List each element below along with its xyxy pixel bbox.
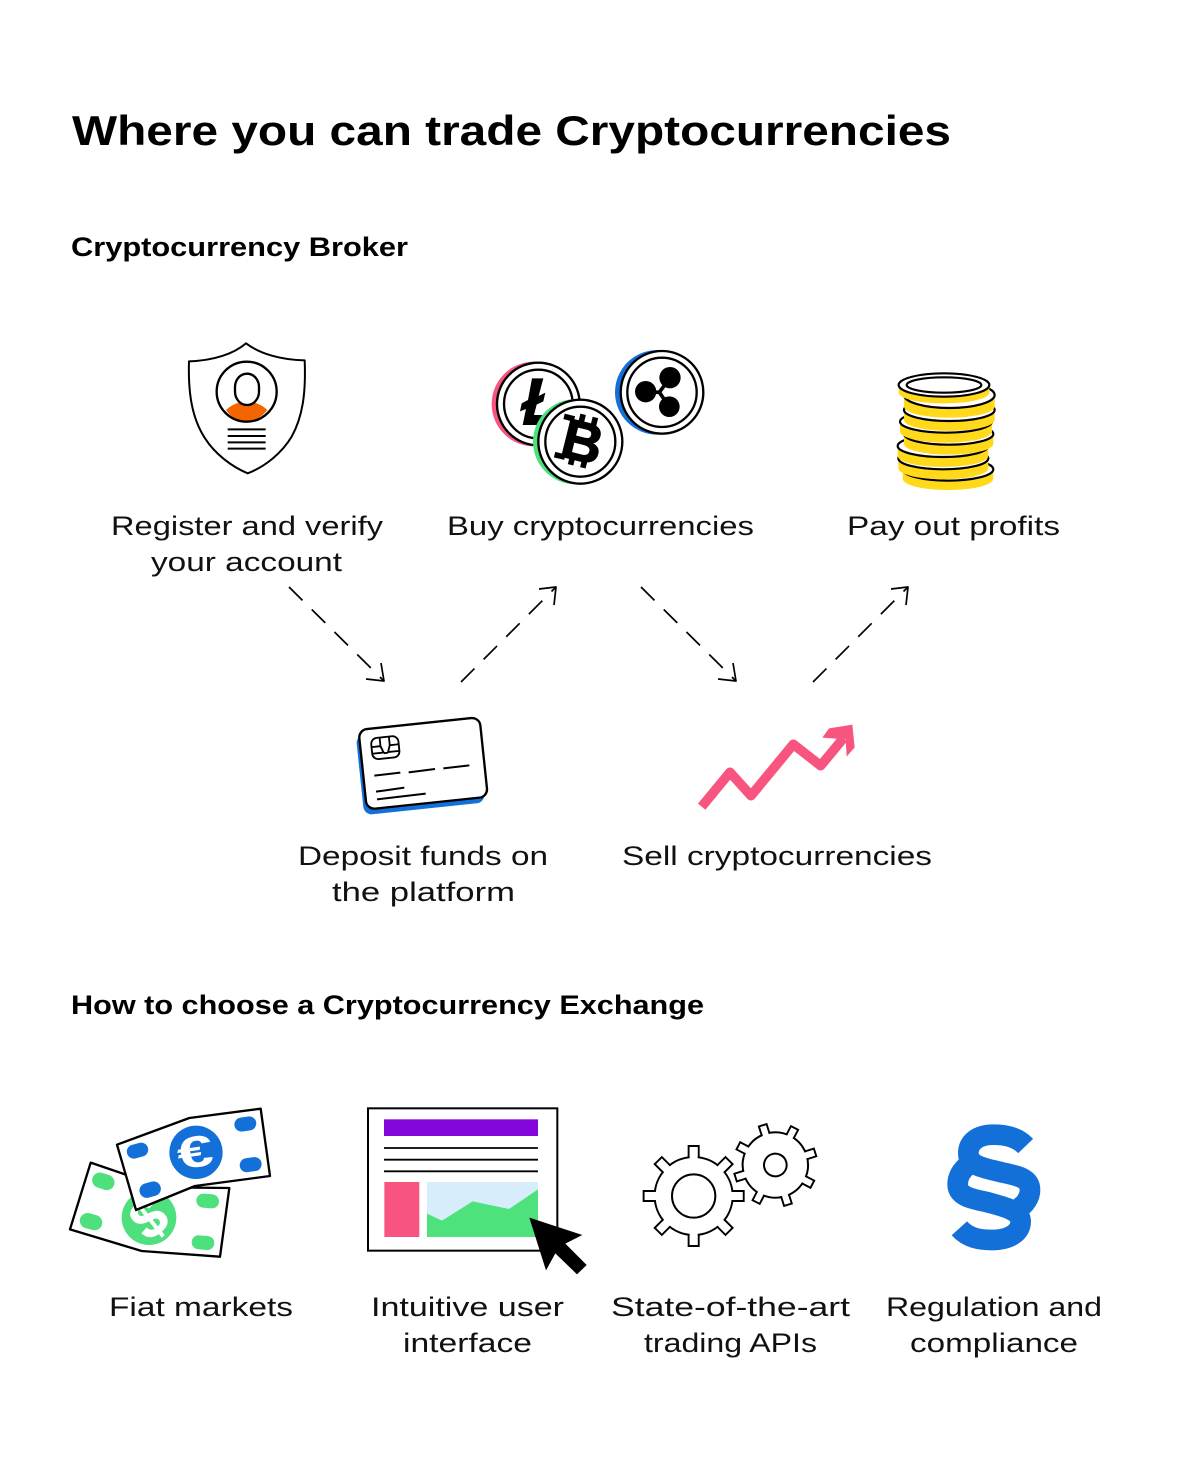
heading: How to choose a Cryptocurrency Exchange: How to choose a Cryptocurrency Exchange	[71, 990, 704, 1020]
icon: bank card	[356, 717, 488, 815]
euro banknote	[117, 1109, 270, 1210]
large gear	[644, 1146, 744, 1246]
label: Regulation and compliance: Regulation and	[886, 1292, 1102, 1322]
small gear	[723, 1113, 828, 1217]
label: Intuitive user interface: interface	[403, 1328, 532, 1358]
label: State-of-the-art trading APIs: trading APIs	[644, 1328, 817, 1358]
icon: verified account shield	[189, 343, 305, 473]
dollar banknote: $	[117, 1184, 180, 1252]
icon: gears	[644, 1113, 828, 1246]
label: Sell cryptocurrencies: Sell cryptocurrencies	[622, 841, 932, 871]
icon: section sign for regulation	[958, 1135, 1030, 1240]
label: Register and verify your account: your account	[151, 547, 343, 577]
heading: Cryptocurrency Broker: Cryptocurrency Broker	[71, 232, 409, 262]
coin: bitcoin	[533, 399, 622, 484]
label: Deposit funds on the platform: the platform	[332, 877, 515, 907]
label: State-of-the-art trading APIs: State-of-the-art	[611, 1292, 851, 1322]
coin: litecoin	[492, 362, 580, 446]
label: State-of-the-art trading APIs	[611, 1292, 851, 1358]
label: Regulation and compliance: compliance	[910, 1328, 1078, 1358]
euro banknote: €	[174, 1126, 216, 1179]
label: Intuitive user interface: Intuitive user	[371, 1292, 564, 1322]
label: Fiat markets: Fiat markets	[109, 1292, 293, 1322]
label: Buy cryptocurrencies: Buy cryptocurrencies	[447, 511, 754, 541]
icon: rising trend arrow	[702, 725, 855, 807]
coin: bitcoin: B	[555, 406, 610, 477]
arrow: deposit to buy	[461, 587, 556, 682]
title: Where you can trade Cryptocurrencies	[72, 107, 951, 154]
arrow: register to deposit	[289, 587, 384, 681]
icon: user interface window with cursor	[368, 1108, 587, 1274]
label: Register and verify your account: Register and verify	[111, 511, 384, 541]
dollar banknote	[70, 1163, 229, 1257]
arrow: sell to pay out	[813, 587, 908, 682]
icon: banknotes	[70, 1109, 270, 1257]
label: Regulation and compliance	[886, 1292, 1102, 1358]
label: Pay out profits: Pay out profits	[847, 511, 1060, 541]
arrow: buy to sell	[641, 587, 736, 681]
label: Register and verify your account	[111, 511, 384, 577]
coin: ripple	[615, 350, 703, 435]
cursor	[529, 1218, 587, 1274]
label: Intuitive user interface	[371, 1292, 564, 1358]
label: Deposit funds on the platform: Deposit funds on	[298, 841, 548, 871]
icon: crypto coins	[492, 350, 703, 484]
icon: stack of gold coins	[898, 373, 995, 490]
label: Deposit funds on the platform	[298, 841, 548, 907]
